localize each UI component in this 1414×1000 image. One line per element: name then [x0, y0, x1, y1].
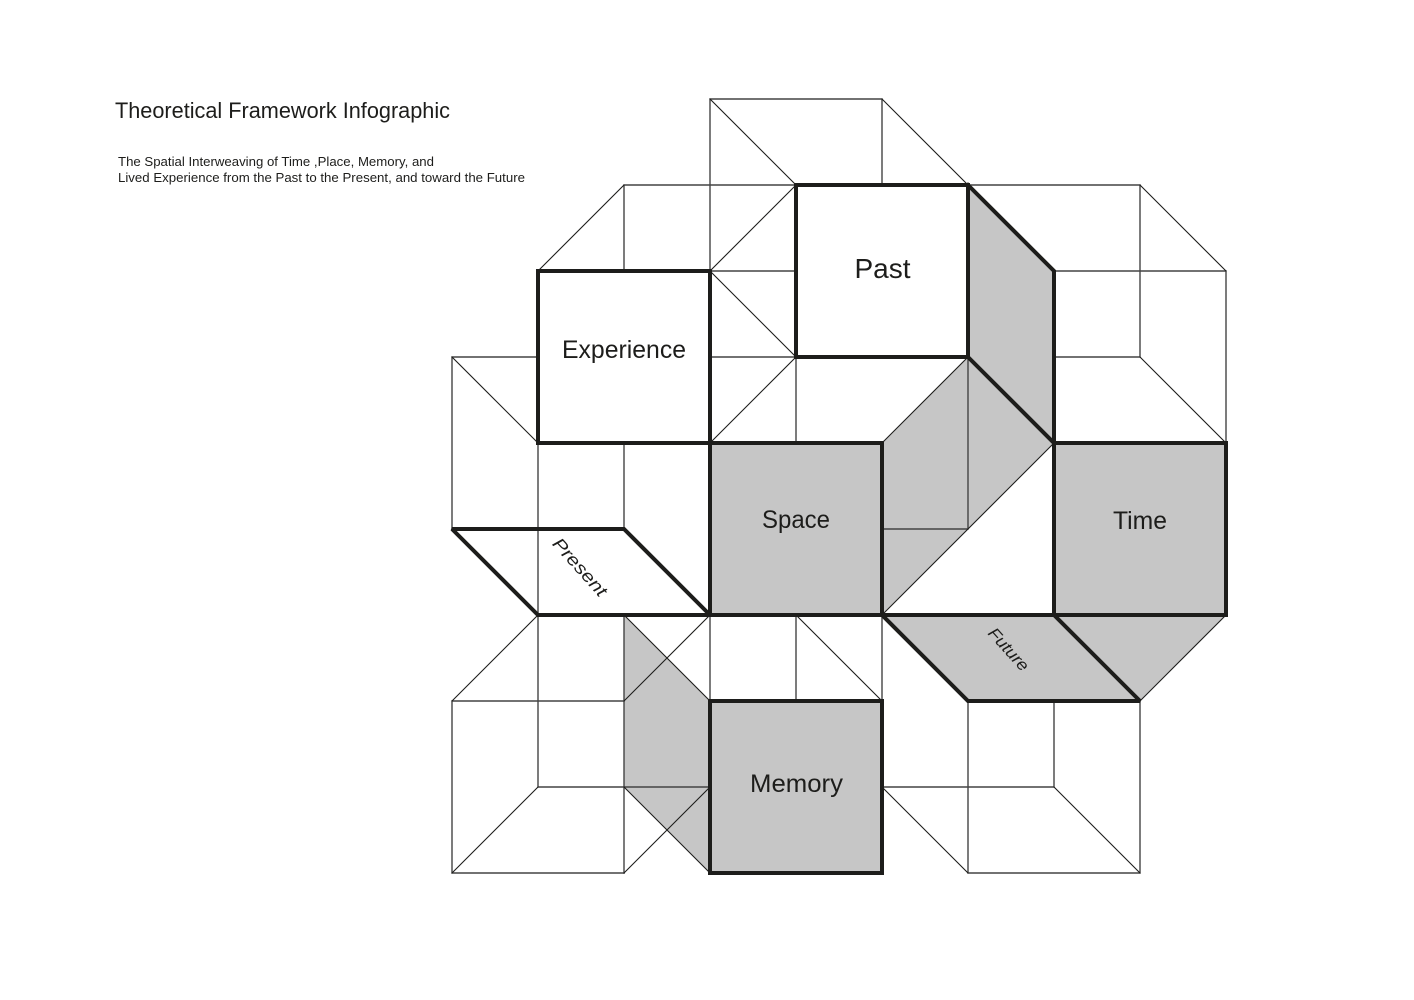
- wireframe diagonal edges: [452, 99, 1226, 873]
- subtitle text block: The Spatial Interweaving of Time ,Place, Memory, and: [118, 154, 434, 169]
- subtitle text block: Lived Experience from the Past to the Present, and toward the Future: [118, 170, 525, 185]
- panel: Memory: [710, 701, 882, 873]
- wireframe thin edges: [452, 99, 1226, 873]
- panel: Memory: Memory: [750, 770, 844, 798]
- panel: Time: [1054, 443, 1226, 615]
- subtitle text block: [118, 154, 525, 185]
- panel: Space: Space: [762, 506, 830, 534]
- panel: Past: [796, 185, 968, 357]
- panel: Past side plane: [968, 185, 1054, 443]
- panel: Present: [452, 529, 710, 615]
- panel: Space: [710, 443, 882, 615]
- panel: Future: Future: [984, 624, 1032, 675]
- panel: Past: Past: [854, 253, 911, 284]
- panel: Future: [882, 615, 1140, 701]
- panel: Experience: [538, 271, 710, 443]
- panel: Time: Time: [1113, 507, 1167, 535]
- title: Theoretical Framework Infographic: [115, 98, 450, 123]
- panel: Experience: Experience: [562, 336, 686, 364]
- panel: Present: Present: [548, 534, 612, 601]
- shaded planes: [624, 185, 1226, 873]
